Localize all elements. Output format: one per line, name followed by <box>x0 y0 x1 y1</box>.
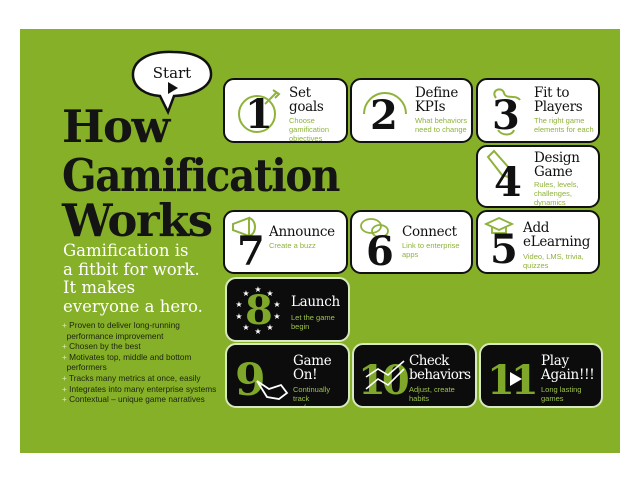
card 7: announce: 7 <box>237 228 265 274</box>
speech bubble: start: Start <box>153 64 191 82</box>
card 10: check behaviors: 10 <box>358 357 406 404</box>
card 9: game on: On! <box>293 366 317 382</box>
icon: trend arrows <box>366 360 404 390</box>
bullet list <box>62 320 216 404</box>
tagline: a fitbit for work. <box>63 260 200 278</box>
icon: star ring: ★ <box>273 300 281 309</box>
card 2: define KPIs: What behaviors <box>415 116 467 125</box>
card 5: add eLearning: Video, LMS, trivia, <box>523 252 584 261</box>
card 10: check behaviors: Adjust, create <box>409 385 455 394</box>
icon: star ring: ★ <box>273 312 281 321</box>
icon: target <box>238 89 280 133</box>
card 1: set goals: 1 <box>245 91 273 138</box>
icon: swirl <box>493 88 521 136</box>
icon: star ring: ★ <box>235 300 243 309</box>
card 9: game on: 9 <box>235 355 266 406</box>
bullet list: performers <box>67 362 107 372</box>
card 1: set goals: gamification <box>289 125 329 134</box>
card 2: define KPIs: KPIs <box>415 98 445 114</box>
icon: play arrow <box>510 372 522 386</box>
tagline: Gamification is <box>63 241 188 260</box>
card 7: announce <box>223 210 348 274</box>
tagline: It makes <box>63 278 135 297</box>
card 1: set goals: Choose <box>289 116 315 125</box>
card 4: design game: Game <box>534 164 572 180</box>
card 4: design game: dynamics <box>534 198 566 207</box>
card 1: set goals: Set <box>289 85 311 101</box>
card 10: check behaviors <box>352 343 477 408</box>
icon: graduation cap <box>484 217 514 234</box>
card 1: set goals <box>223 78 348 143</box>
card 5: add eLearning: quizzes <box>523 261 548 270</box>
bullet list: + Motivates top, middle and bottom <box>62 352 191 362</box>
tagline: everyone a hero. <box>63 296 203 316</box>
icon: star ring: ★ <box>242 323 250 332</box>
bullet list: + Proven to deliver long-running <box>62 320 180 330</box>
card 3: fit to players <box>476 78 600 143</box>
title <box>62 100 340 247</box>
card 9: game on: Continually track <box>293 385 330 403</box>
card 11: play again: games <box>541 394 564 403</box>
card 1: set goals: objectives <box>289 134 322 143</box>
card 9: game on <box>225 343 350 408</box>
card 10: check behaviors: behaviors <box>409 366 470 382</box>
card 10: check behaviors: Check <box>409 353 449 369</box>
card 8: launch <box>225 277 350 342</box>
card 6: connect: Link to enterprise <box>402 241 460 250</box>
icon: chat bubbles <box>360 218 389 238</box>
icon: pencil <box>486 150 509 178</box>
card 8: launch: 8 <box>245 287 273 334</box>
icon: star ring: ★ <box>235 312 243 321</box>
card 3: fit to players: The right game <box>534 116 584 125</box>
card 5: add eLearning: eLearning <box>523 234 590 250</box>
card 7: announce: Create a buzz <box>269 241 316 250</box>
card 11: play again <box>479 343 603 408</box>
icon: gauge <box>363 92 407 114</box>
speech bubble: start <box>132 50 212 115</box>
icon: star ring <box>235 285 281 336</box>
card 6: connect: apps <box>402 250 418 259</box>
card 2: define KPIs: Define <box>415 85 458 101</box>
card 11: play again: 11 <box>487 357 535 404</box>
card 8: launch: Launch <box>291 294 340 310</box>
card 6: connect: Connect <box>402 224 457 240</box>
card 11: play again: Play <box>541 353 569 369</box>
icon: star ring: ★ <box>266 289 274 298</box>
bullet list: + Tracks many metrics at once, easily <box>62 373 201 383</box>
card 10: check behaviors: habits <box>409 394 429 403</box>
card 2: define KPIs <box>350 78 473 143</box>
card 5: add eLearning: 5 <box>490 226 518 273</box>
title: Gamification <box>62 149 339 202</box>
card 4: design game: Design <box>534 150 580 166</box>
icon: megaphone <box>232 216 256 236</box>
icon: star ring: ★ <box>254 285 262 294</box>
card 4: design game: challenges, <box>534 189 572 198</box>
card 4: design game: Rules, levels, <box>534 180 579 189</box>
card 3: fit to players: Fit to <box>534 85 569 101</box>
card 6: connect <box>350 210 473 274</box>
card 9: game on: Game <box>293 353 331 369</box>
card 4: design game: 4 <box>494 159 522 206</box>
bullet list: performance improvement <box>67 331 163 341</box>
icon: star ring: ★ <box>242 289 250 298</box>
card 3: fit to players: 3 <box>492 92 520 139</box>
card 7: announce: Announce <box>269 224 335 240</box>
card 4: design game <box>476 145 600 208</box>
bullet list: + Integrates into many enterprise systems <box>62 384 216 394</box>
title: How <box>62 100 169 153</box>
bullet list: + Contextual – unique game narratives <box>62 394 205 404</box>
icon: star ring: ★ <box>254 327 262 336</box>
card 11: play again: Again!!! <box>541 366 594 382</box>
icon: pointing hand <box>256 380 288 400</box>
title: Works <box>62 194 212 247</box>
icon: star ring: ★ <box>266 323 274 332</box>
bullet list: + Chosen by the best <box>62 341 141 351</box>
card 2: define KPIs: 2 <box>370 92 398 139</box>
card 1: set goals: goals <box>289 98 324 114</box>
card 2: define KPIs: need to change <box>415 125 467 134</box>
card 8: launch: begin <box>291 322 309 331</box>
card 3: fit to players: elements for each <box>534 125 594 134</box>
tagline <box>63 241 203 316</box>
card 6: connect: 6 <box>366 228 394 274</box>
card 11: play again: Long lasting <box>541 385 581 394</box>
card 5: add eLearning: Add <box>523 220 549 236</box>
card 5: add eLearning <box>476 210 600 274</box>
card 3: fit to players: Players <box>534 98 582 114</box>
card 8: launch: Let the game <box>291 313 335 322</box>
